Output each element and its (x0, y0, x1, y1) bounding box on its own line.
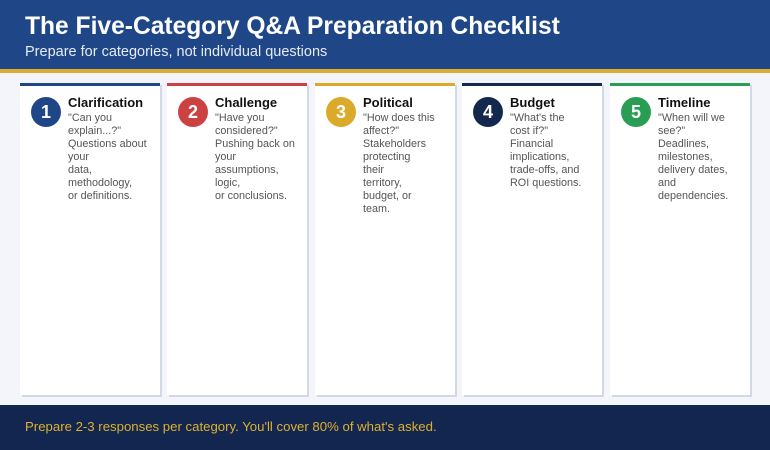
text: timeline: and (658, 177, 676, 189)
text: political: Stakeholders (363, 138, 426, 150)
text: challenge: considered?" (215, 125, 278, 137)
text: political (363, 112, 435, 215)
icon: number 1: 1 (41, 102, 51, 122)
heading: Timeline: Timeline (658, 95, 711, 110)
text: clarification: your (68, 151, 89, 163)
icon: number 2: 2 (188, 102, 198, 122)
text: challenge: logic, (215, 177, 240, 189)
panel: budget (462, 83, 602, 395)
text: political: their (363, 164, 384, 176)
text: budget: implications, (510, 151, 569, 163)
text: political: territory, (363, 177, 402, 189)
header (0, 0, 770, 69)
text: clarification: methodology, (68, 177, 132, 189)
panel: clarification (20, 83, 160, 395)
text: political: budget, or (363, 190, 412, 202)
footer (0, 405, 770, 450)
icon: number 4 (473, 97, 503, 127)
text: challenge: Pushing back on (215, 138, 295, 150)
text: timeline: Deadlines, (658, 138, 709, 150)
heading: Challenge: Challenge (215, 95, 277, 110)
icon: number 5: 5 (631, 102, 641, 122)
text: clarification: explain...?" (68, 125, 121, 137)
text: political: affect?" (363, 125, 399, 137)
text: challenge (215, 112, 295, 202)
heading: Budget: Budget (510, 95, 555, 110)
heading: Clarification: Clarification (68, 95, 143, 110)
text: timeline: milestones, (658, 151, 713, 163)
footer text: Prepare 2-3 responses per category. You'll cover 80% of what's asked. (25, 419, 437, 434)
text: timeline: see?" (658, 125, 685, 137)
text: budget: cost if?" (510, 125, 548, 137)
panel: challenge (167, 83, 307, 395)
heading: Political: Political (363, 95, 413, 110)
text: political: protecting (363, 151, 410, 163)
icon: number 5 (621, 97, 651, 127)
icon: number 3 (326, 97, 356, 127)
panel: political (315, 83, 455, 395)
panel: timeline (610, 83, 750, 395)
text: challenge: or conclusions. (215, 190, 287, 202)
text: budget: ROI questions. (510, 177, 581, 189)
text: budget: "What's the (510, 112, 565, 124)
text: clarification: "Can you (68, 112, 112, 124)
text: budget: Financial (510, 138, 553, 150)
text: clarification: or definitions. (68, 190, 132, 202)
text: political: "How does this (363, 112, 435, 124)
text: challenge: assumptions, (215, 164, 279, 176)
text: timeline: dependencies. (658, 190, 728, 202)
icon: number 2 (178, 97, 208, 127)
text: challenge: your (215, 151, 236, 163)
text: clarification: data, (68, 164, 92, 176)
icon: number 1 (31, 97, 61, 127)
text: timeline: delivery dates, (658, 164, 728, 176)
text: challenge: "Have you (215, 112, 264, 124)
text: budget (510, 112, 581, 189)
icon: number 4: 4 (483, 102, 493, 122)
text: clarification (68, 112, 147, 202)
icon: number 3: 3 (336, 102, 346, 122)
title: The Five-Category Q&A Preparation Checklist (25, 13, 560, 40)
text: clarification: Questions about (68, 138, 147, 150)
text: budget: trade-offs, and (510, 164, 579, 176)
subtitle: Prepare for categories, not individual questions (25, 44, 327, 60)
text: timeline: "When will we (658, 112, 725, 124)
text: timeline (658, 112, 728, 202)
text: political: team. (363, 203, 390, 215)
